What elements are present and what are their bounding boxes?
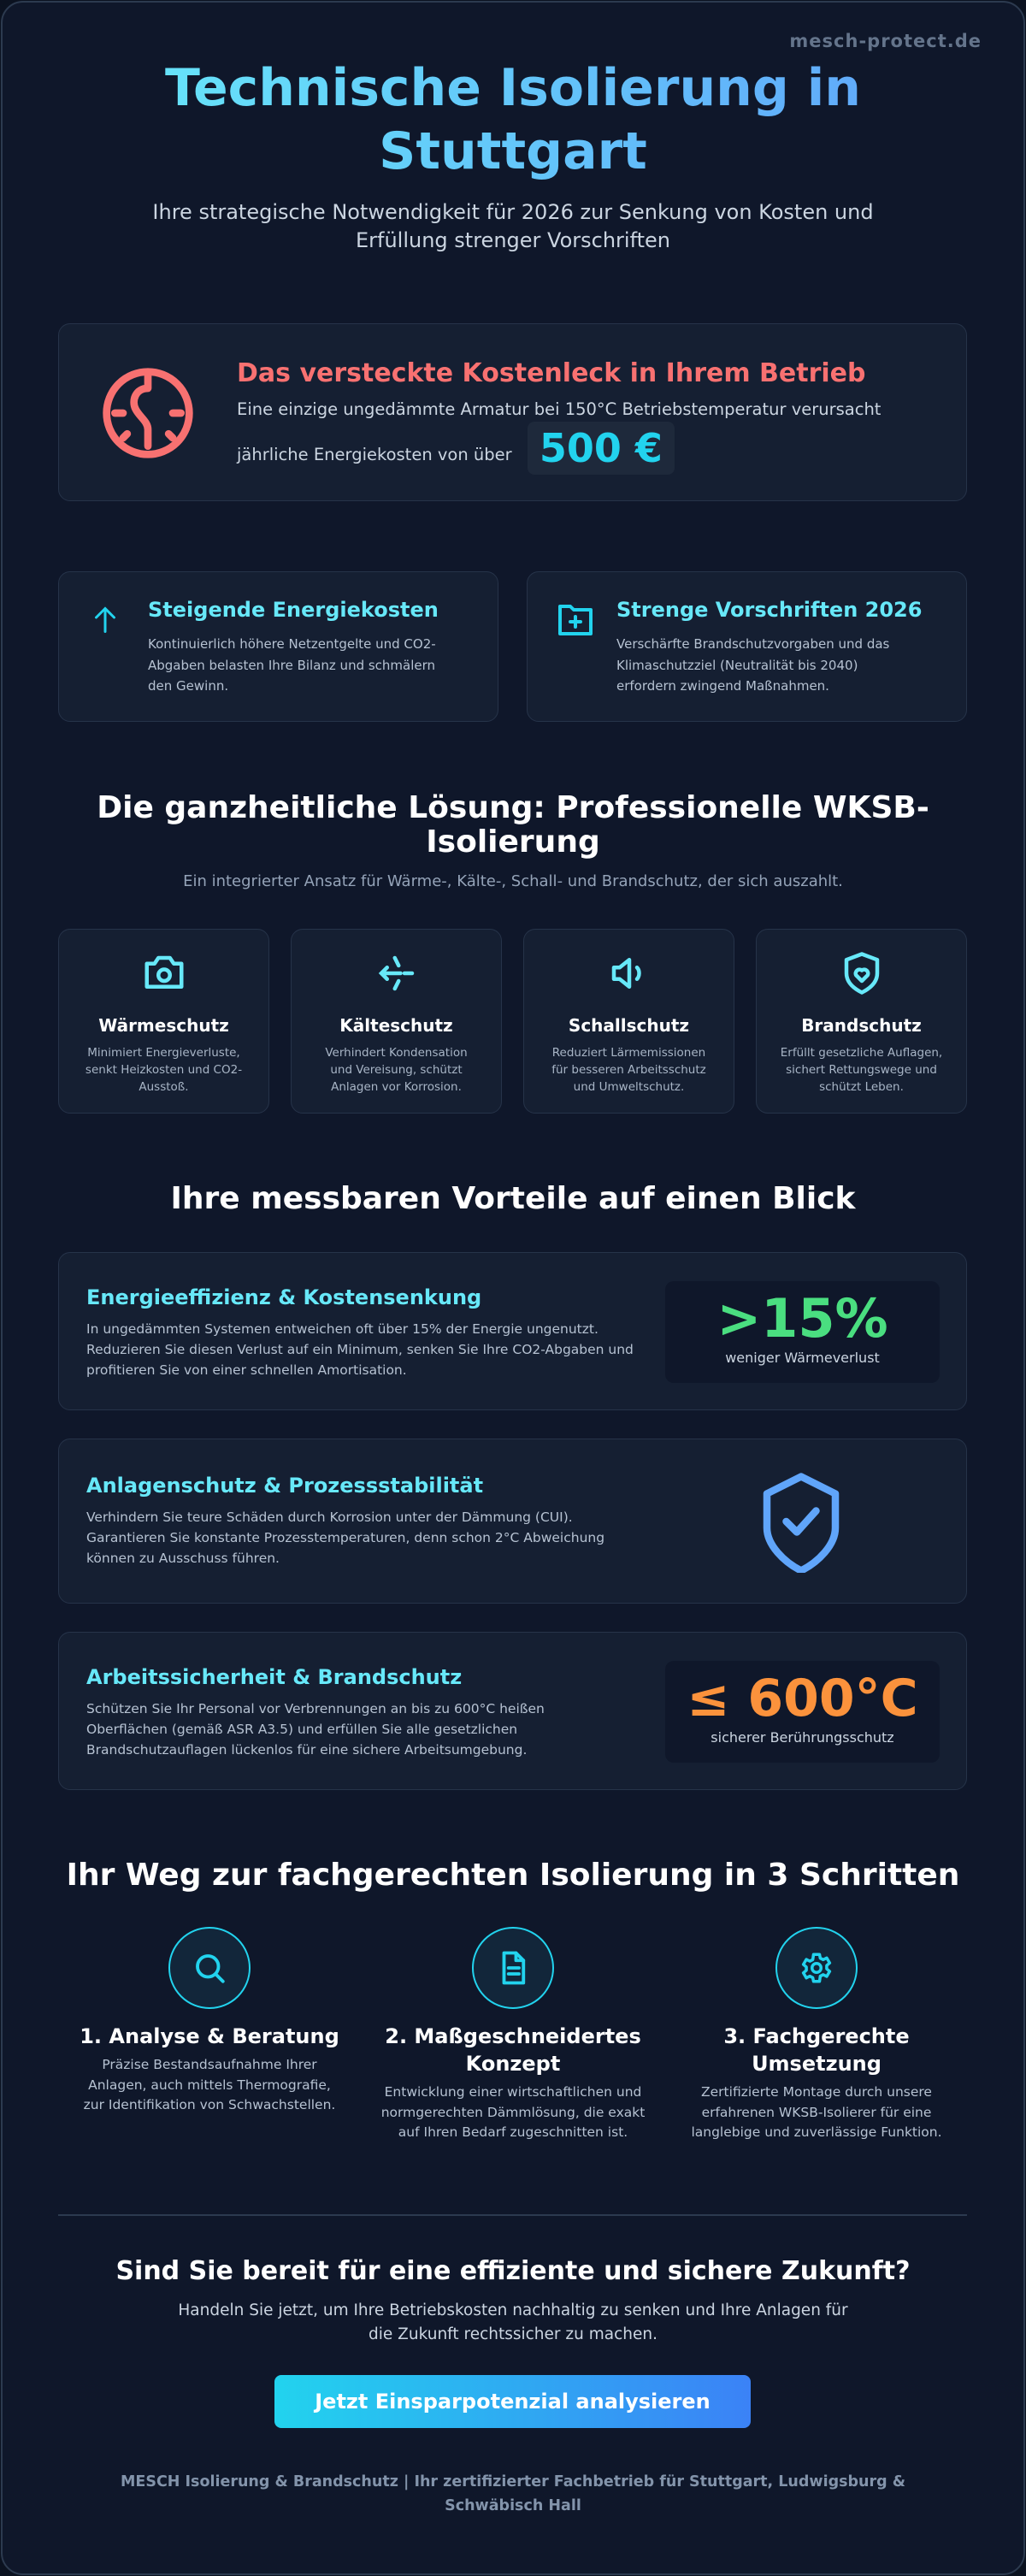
panel: waermeschutz [58,929,269,1114]
text block with badge: jährliche Energiekosten von über [237,445,512,464]
heading: Anlagenschutz & Prozessstabilität [86,1474,483,1498]
CTA button: Jetzt Einsparpotenzial analysieren [315,2390,711,2414]
text: Entwicklung einer wirtschaftlichen und normgerechten Dämmlösung, die exakt auf Ihren Bedarf zugeschnitten ist. [381,2084,645,2140]
title: 3. Fachgerechte Umsetzung [723,2024,910,2076]
CTA heading: Sind Sie bereit für eine effiziente und sichere Zukunft? [115,2256,911,2286]
title: Wärmeschutz [98,1015,229,1036]
icon: search [168,1927,251,2009]
panel: brandschutz [756,929,967,1114]
icon: speaker [612,958,641,989]
text: Verhindern Sie teure Schäden durch Korrosion unter der Dämmung (CUI). Garantieren Sie konstante Prozesstemperaturen, denn schon 2°C Abweichung können zu Ausschuss führen. [86,1510,604,1566]
text block with badge: 500 € [540,425,663,471]
panel: schallschutz [523,929,734,1114]
heading: solution: Die ganzheitliche Lösung: Professionelle WKSB-Isolierung [97,790,929,860]
heading: Strenge Vorschriften 2026 [616,598,922,622]
text: Erfüllt gesetzliche Auflagen, sichert Rettungswege und schützt Leben. [781,1046,942,1094]
icon: gauge [103,368,193,458]
icon: arrow up [94,607,115,633]
title: Brandschutz [801,1015,922,1036]
CTA text [178,2301,848,2343]
text: Verschärfte Brandschutzvorgaben und das Klimaschutzziel (Neutralität bis 2040) erfordern zwingend Maßnahmen. [616,636,889,694]
panel: asset protection [58,1439,967,1604]
text block with badge: Eine einzige ungedämmte Armatur bei 150°C Betriebstemperatur verursacht [237,399,881,419]
domain label: mesch-protect.de [789,31,982,51]
stat box: ≤ 600°C [687,1669,918,1728]
heading: steps: Ihr Weg zur fachgerechten Isolierung in 3 Schritten [67,1858,959,1893]
stat box [665,1661,940,1763]
text block with badge [236,399,881,475]
panel: kaelteschutz [291,929,502,1114]
stat box [665,1281,940,1383]
subheading: Ein integrierter Ansatz für Wärme-, Kälte-, Schall- und Brandschutz, der sich auszahlt. [183,872,843,890]
title: 1. Analyse & Beratung [80,2024,339,2048]
title: 2. Maßgeschneidertes Konzept [385,2024,641,2076]
icon: gear [775,1927,858,2009]
step 1 [80,1927,339,2112]
heading: Arbeitssicherheit & Brandschutz [86,1665,462,1689]
icon: shield heart [845,952,879,995]
icon: folder plus [558,605,593,635]
stat box: sicherer Berührungsschutz [711,1729,894,1746]
panel: safety [58,1632,967,1790]
icon: arrows [378,956,414,990]
step 2 [381,1927,645,2140]
text: Präzise Bestandsaufnahme Ihrer Anlagen, auch mittels Thermografie, zur Identifikation von Schwachstellen. [84,2057,335,2112]
heading: Steigende Energiekosten [148,598,439,622]
icon: camera [145,956,183,989]
CTA button [274,2375,751,2428]
icon: shield check [763,1473,840,1573]
text: Reduziert Lärmemissionen für besseren Arbeitsschutz und Umweltschutz. [551,1046,706,1094]
panel: regulations [527,571,967,722]
step 3 [691,1927,942,2140]
subtitle: Ihre strategische Notwendigkeit für 2026 zur Senkung von Kosten und Erfüllung strenger Vorschriften [152,200,874,252]
title: Schallschutz [569,1015,689,1036]
footer: MESCH Isolierung & Brandschutz | Ihr zertifizierter Fachbetrieb für Stuttgart, Ludwigsburg & Schwäbisch Hall [121,2473,905,2514]
CTA text: die Zukunft rechtssicher zu machen. [369,2325,657,2343]
title [165,58,861,181]
panel: rising costs [58,571,498,722]
CTA text: Handeln Sie jetzt, um Ihre Betriebskosten nachhaltig zu senken und Ihre Anlagen für [178,2301,848,2319]
stat box: >15% [716,1287,888,1350]
text: Schützen Sie Ihr Personal vor Verbrennungen an bis zu 600°C heißen Oberflächen (gemäß ASR A3.5) und erfüllen Sie alle gesetzlichen Brandschutzauflagen lückenlos für eine sichere Arbeitsumgebung. [86,1701,545,1758]
stat box: weniger Wärmeverlust [725,1350,880,1366]
text: Verhindert Kondensation und Vereisung, schützt Anlagen vor Korrosion. [325,1046,468,1094]
title: Technische Isolierung in [165,58,861,118]
text: In ungedämmten Systemen entweichen oft über 15% der Energie ungenutzt. Reduzieren Sie diesen Verlust auf ein Minimum, senken Sie Ihre CO2-Abgaben und profitieren Sie von einer schnellen Amortisation. [86,1321,634,1378]
heading: Das versteckte Kostenleck in Ihrem Betrieb [237,358,865,388]
text: Minimiert Energieverluste, senkt Heizkosten und CO2-Ausstoß. [86,1046,242,1094]
icon: document [472,1927,554,2009]
title: Stuttgart [379,121,647,181]
panel: cost leak [58,323,967,501]
text: Kontinuierlich höhere Netzentgelte und CO2-Abgaben belasten Ihre Bilanz und schmälern den Gewinn. [148,636,436,694]
heading: Energieeffizienz & Kostensenkung [86,1285,481,1309]
text: Zertifizierte Montage durch unsere erfahrenen WKSB-Isolierer für eine langlebige und zuverlässige Funktion. [691,2084,942,2140]
title: Kälteschutz [339,1015,453,1036]
heading: benefits: Ihre messbaren Vorteile auf einen Blick [170,1181,856,1216]
panel: efficiency [58,1252,967,1410]
